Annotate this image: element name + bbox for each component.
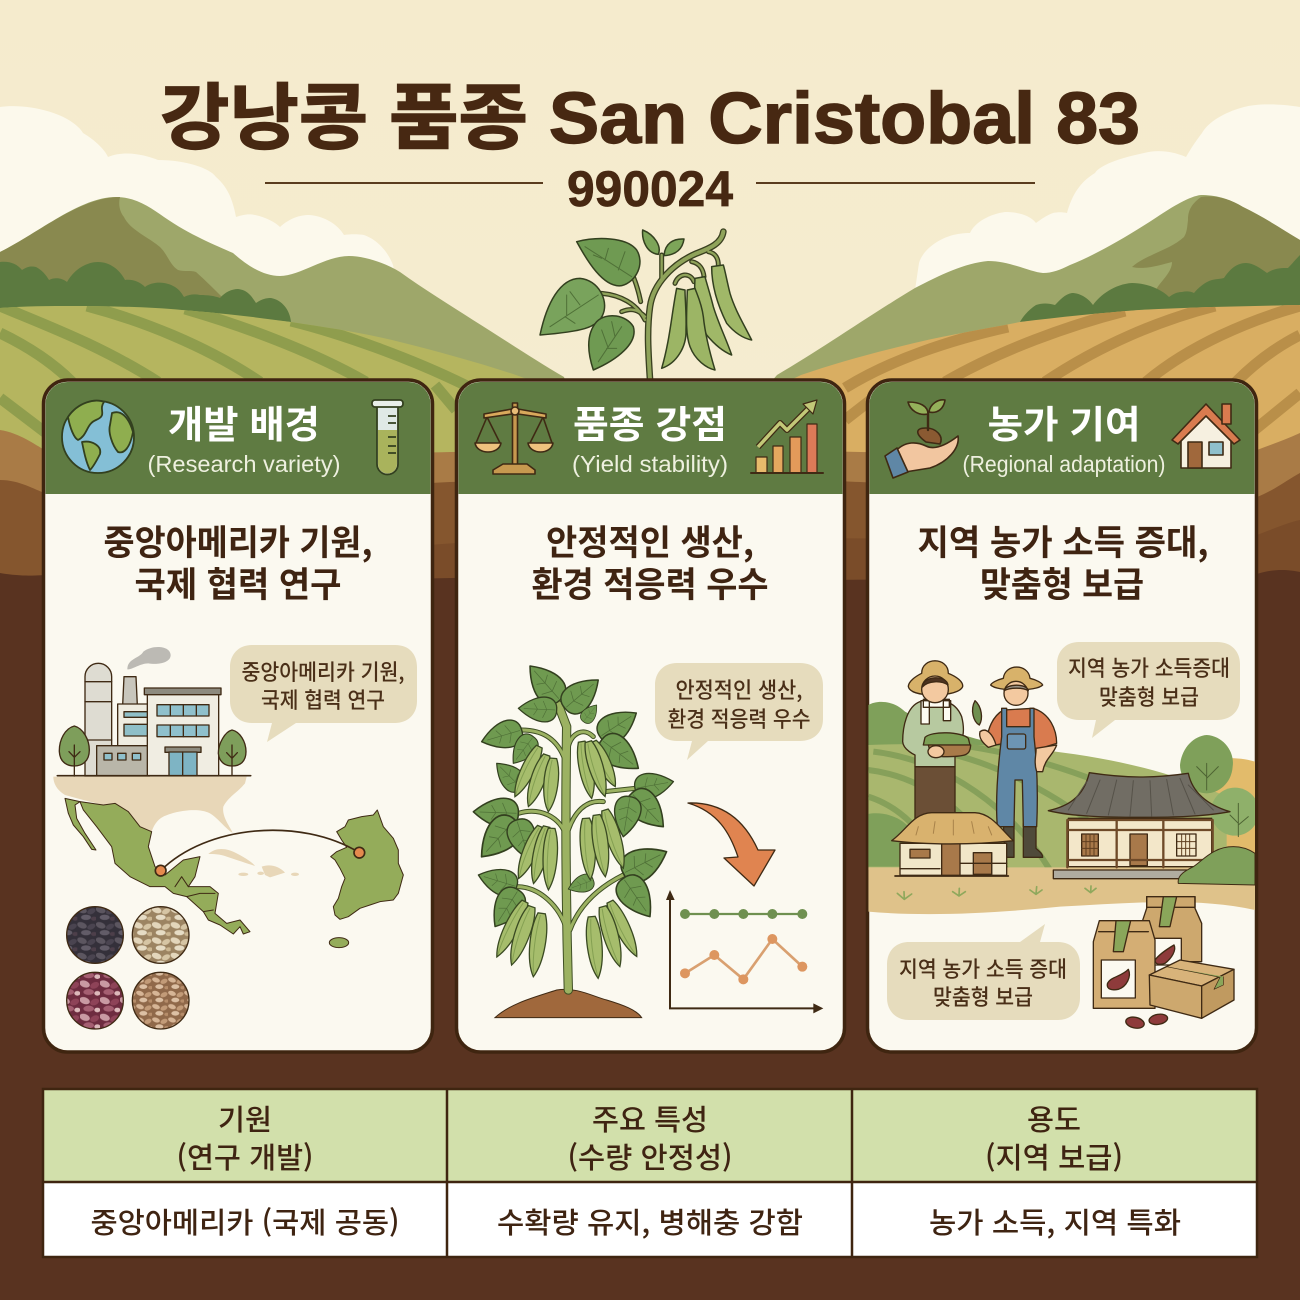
farmer with basket bbox=[903, 661, 971, 820]
panel 3 card bbox=[868, 380, 1256, 1052]
panel 3 heading: (Regional adaptation) bbox=[962, 451, 1166, 477]
icon: top bean plant bbox=[540, 230, 752, 379]
table cell backgrounds bbox=[43, 1089, 1257, 1257]
subtitle code with rules: 990024 bbox=[567, 161, 733, 217]
panel: development background bbox=[44, 380, 432, 1052]
icon: hand holding sprout bbox=[885, 400, 958, 478]
thatched house bbox=[892, 813, 1013, 876]
column: use: 용도 bbox=[1027, 1097, 1081, 1139]
panel 1 summary text bbox=[104, 515, 372, 608]
panel 2 summary text: 안정적인 생산, bbox=[546, 515, 754, 566]
column: use bbox=[929, 1097, 1181, 1242]
panel 2 summary text: 환경 적응력 우수 bbox=[532, 557, 768, 608]
landscape bbox=[868, 702, 1255, 914]
icon: house bbox=[1172, 404, 1240, 468]
callout: stability: 안정적인 생산, bbox=[676, 673, 802, 705]
panel 2 summary text bbox=[532, 515, 768, 608]
summary table bbox=[43, 1089, 1257, 1257]
column: origin: 기원 bbox=[218, 1097, 272, 1139]
illustration: bean plant with pods bbox=[470, 656, 676, 1018]
map: Korea bbox=[329, 810, 403, 948]
column: origin: 중앙아메리카 (국제 공동) bbox=[90, 1200, 400, 1242]
stem and branches bbox=[517, 705, 635, 990]
callout: income bottom: 맞춤형 보급 bbox=[933, 980, 1033, 1012]
illustration: village scene bbox=[868, 661, 1259, 1030]
panel 3 heading: 농가 기여 bbox=[988, 394, 1140, 449]
panel 1 heading: 개발 배경 bbox=[168, 394, 320, 449]
callout: origin bbox=[230, 645, 417, 742]
panel 3 summary text: 지역 농가 소득 증대, bbox=[918, 515, 1208, 566]
callout: income top: 맞춤형 보급 bbox=[1099, 680, 1199, 712]
callout: income top: 지역 농가 소득증대 bbox=[1068, 651, 1230, 683]
column: key traits bbox=[497, 1097, 803, 1242]
panel 2 heading bbox=[572, 394, 728, 477]
panel 2 heading: 품종 강점 bbox=[573, 394, 727, 449]
illustration: research facility bbox=[57, 647, 251, 777]
column: use: (지역 보급) bbox=[985, 1135, 1123, 1177]
icon: balance scale bbox=[475, 403, 553, 474]
callout: stability: 환경 적응력 우수 bbox=[668, 702, 810, 734]
panel 3 heading bbox=[962, 394, 1166, 477]
icon: rising bar chart bbox=[751, 400, 823, 473]
column: key traits: 주요 특성 bbox=[592, 1097, 708, 1139]
callout: stability bbox=[655, 663, 823, 760]
stem fill bbox=[517, 705, 635, 990]
arrow: origin to Korea route bbox=[155, 830, 365, 876]
arrow: downturn bbox=[688, 803, 775, 886]
grass tufts bbox=[897, 886, 1096, 899]
leaves bbox=[470, 656, 676, 934]
callout: origin: 중앙아메리카 기원, bbox=[242, 655, 404, 687]
illustration: beige land mass and Caribbean islands bbox=[53, 777, 299, 877]
icon: test tube bbox=[372, 400, 403, 474]
farmer in overalls bbox=[973, 667, 1057, 857]
front bush bbox=[1178, 847, 1255, 885]
callout: origin: 국제 협력 연구 bbox=[261, 683, 385, 715]
soil mound bbox=[495, 989, 642, 1018]
trees behind hanok bbox=[1180, 735, 1259, 837]
callout: income bottom bbox=[887, 924, 1080, 1020]
callout: income bottom: 지역 농가 소득 증대 bbox=[899, 952, 1067, 984]
panel 1 summary text: 국제 협력 연구 bbox=[134, 557, 342, 608]
title: 강낭콩 품종 San Cristobal 83 bbox=[160, 79, 1140, 159]
panel 3 summary text bbox=[918, 515, 1208, 608]
icon: globe bbox=[62, 401, 134, 473]
panel: farm contribution bbox=[868, 380, 1259, 1052]
panel 2 card bbox=[456, 380, 844, 1052]
bean bags bbox=[1093, 897, 1234, 1030]
column: origin bbox=[90, 1097, 400, 1242]
column: key traits: 수확량 유지, 병해충 강함 bbox=[497, 1200, 803, 1242]
panel 1 card bbox=[44, 380, 432, 1052]
panel 1 heading: (Research variety) bbox=[148, 451, 340, 477]
panel: variety strengths bbox=[456, 380, 844, 1052]
panel 1 summary text: 중앙아메리카 기원, bbox=[104, 515, 372, 566]
column: key traits: (수량 안정성) bbox=[568, 1135, 732, 1177]
hanok house bbox=[1048, 773, 1230, 879]
callout: income top bbox=[1057, 642, 1240, 738]
column: use: 농가 소득, 지역 특화 bbox=[929, 1200, 1181, 1242]
column: origin: (연구 개발) bbox=[176, 1135, 314, 1177]
line chart: stable vs variable yield bbox=[666, 890, 823, 1013]
panel 3 summary text: 맞춤형 보급 bbox=[980, 557, 1144, 608]
map: Mexico and Central America bbox=[65, 798, 250, 934]
pods bbox=[490, 739, 643, 979]
panel 2 heading: (Yield stability) bbox=[572, 451, 728, 477]
bean variety samples bbox=[67, 907, 189, 1029]
panel 1 heading bbox=[148, 394, 340, 477]
